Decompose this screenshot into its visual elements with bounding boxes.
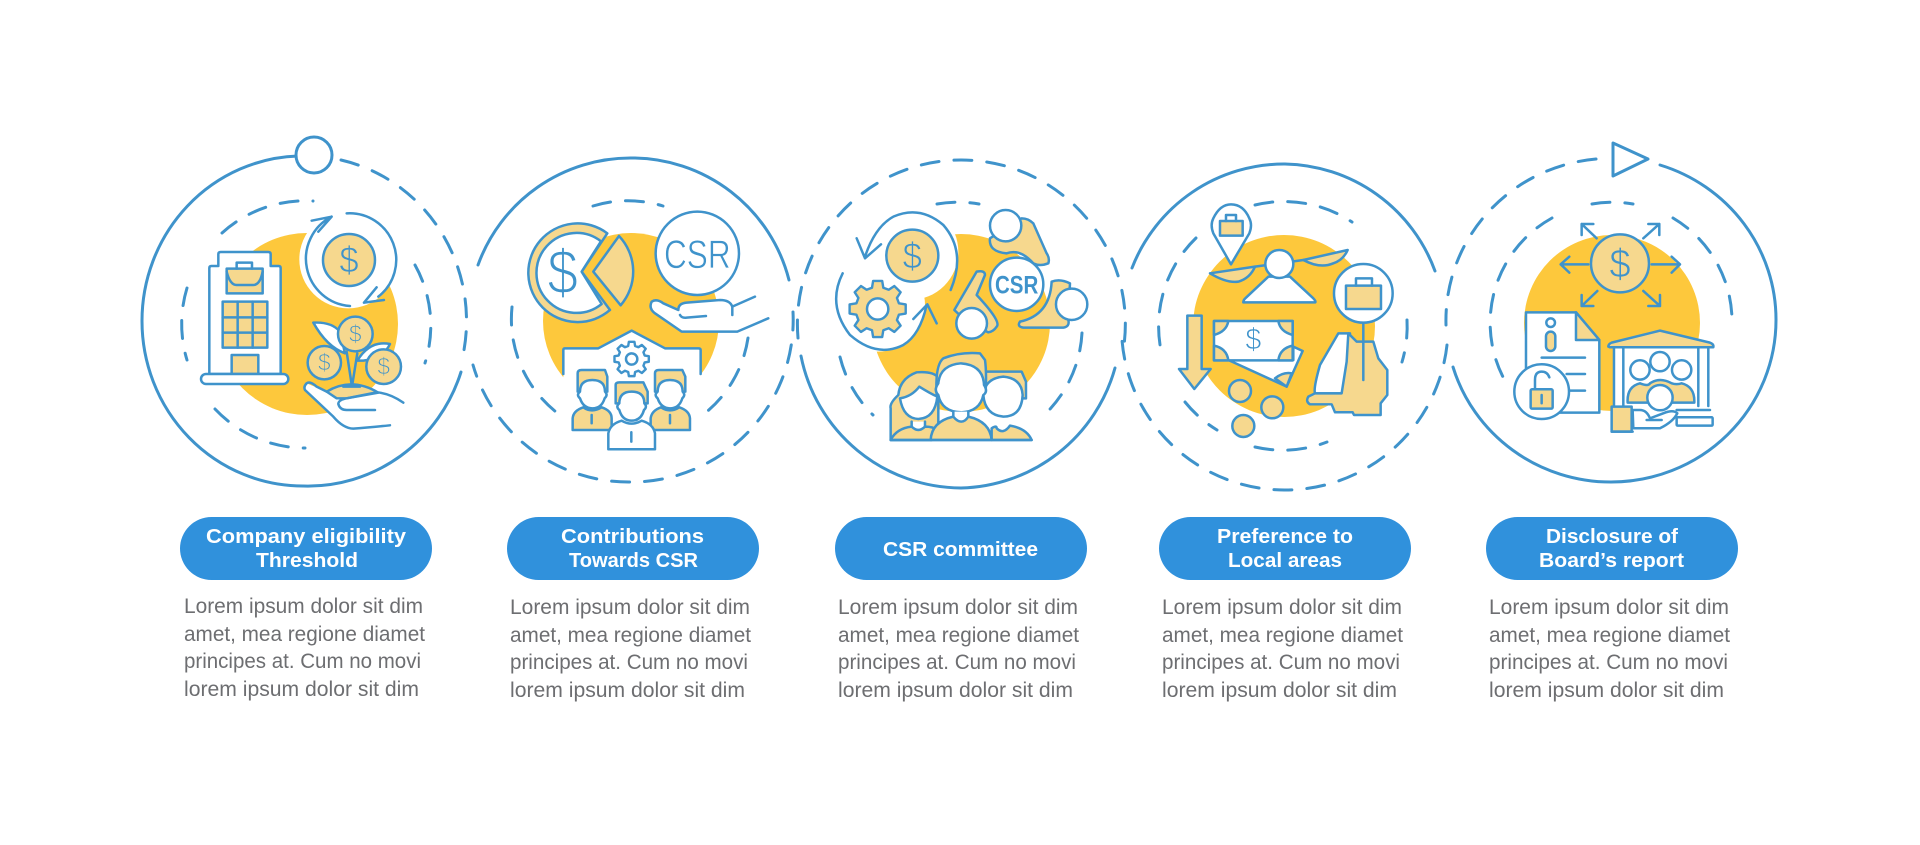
- icon: circular money arrows: $: [339, 239, 359, 281]
- icon: CSR network: [954, 210, 1087, 339]
- body text 2: principes at. Cum no movi: [510, 651, 748, 674]
- body text 3: amet, mea regione diamet: [838, 624, 1079, 647]
- label pill 1: Threshold: [256, 549, 358, 572]
- yellow blob 3: [872, 234, 1050, 412]
- outer ring 2: [473, 158, 793, 482]
- icon: hand holding magnifier: [1307, 264, 1393, 415]
- icon: open lock: [1514, 364, 1569, 419]
- icon: three people: [890, 353, 1032, 440]
- body text 1: [184, 595, 425, 701]
- label pill 1: [180, 517, 432, 580]
- body text 5: Lorem ipsum dolor sit dim: [1489, 596, 1729, 619]
- body text 4: Lorem ipsum dolor sit dim: [1162, 596, 1402, 619]
- icon: money and gear cycle: [832, 203, 958, 352]
- icon: dollar pie chart: [528, 223, 633, 322]
- label pill 3: CSR committee: [883, 538, 1038, 561]
- panel: CSR committee: [797, 160, 1125, 702]
- outer ring 4: [1122, 164, 1447, 490]
- yellow blob 2: [543, 233, 719, 409]
- icon: committee: [832, 203, 1087, 440]
- body text 3: [838, 596, 1079, 702]
- body text 1: lorem ipsum dolor sit dim: [184, 678, 419, 701]
- label pill 4: Preference to: [1217, 525, 1353, 548]
- label pill 4: Local areas: [1228, 549, 1342, 572]
- body text 4: amet, mea regione diamet: [1162, 624, 1403, 647]
- body text 4: [1162, 596, 1403, 702]
- icon: house with gear: [563, 331, 701, 413]
- icon: money plant in hand: [304, 317, 403, 429]
- icon: disclosure: [1514, 224, 1713, 432]
- icon: money plant in hand: $: [318, 350, 331, 377]
- body text 3: Lorem ipsum dolor sit dim: [838, 596, 1078, 619]
- body text 4: lorem ipsum dolor sit dim: [1162, 679, 1397, 702]
- label pill 2: Contributions: [561, 525, 704, 548]
- body text 2: Lorem ipsum dolor sit dim: [510, 596, 750, 619]
- icon: local preference: [1179, 204, 1393, 437]
- body text 3: lorem ipsum dolor sit dim: [838, 679, 1073, 702]
- label pill 2: Towards CSR: [569, 549, 698, 572]
- icon: team of three: [573, 370, 690, 449]
- icon: office building: [201, 252, 288, 384]
- body text 4: principes at. Cum no movi: [1162, 651, 1400, 674]
- icon: down arrow: [1179, 316, 1211, 389]
- body text 1: principes at. Cum no movi: [184, 650, 421, 673]
- body text 5: principes at. Cum no movi: [1489, 651, 1728, 674]
- icon: information document: [1526, 312, 1599, 413]
- panel: preference to local areas: [1122, 164, 1447, 702]
- icon: balance scale: [1210, 250, 1348, 302]
- panel: company eligibility threshold: [142, 137, 467, 701]
- body text 5: [1489, 596, 1730, 702]
- label pill 5: Disclosure of: [1546, 525, 1678, 548]
- label pill 1: Company eligibility: [206, 525, 407, 548]
- body text 2: amet, mea regione diamet: [510, 624, 751, 647]
- icon: money notes and coins: [1214, 321, 1303, 437]
- yellow blob 4: [1193, 235, 1375, 417]
- inner dashed ring 2: [511, 201, 748, 417]
- icon: money and gear cycle: $: [903, 234, 922, 276]
- panel: contributions towards CSR: [473, 158, 793, 702]
- label pill 5: [1486, 517, 1738, 580]
- body text 3: principes at. Cum no movi: [838, 651, 1076, 674]
- body text 2: [510, 596, 751, 702]
- icon: dollar with outward arrows: $: [1609, 240, 1631, 286]
- panel: disclosure of board's report: [1446, 143, 1776, 702]
- label pill 3: [835, 517, 1087, 580]
- label pill 4: [1159, 517, 1411, 580]
- body text 2: lorem ipsum dolor sit dim: [510, 679, 745, 702]
- icon: CSR network: CSR: [995, 272, 1038, 299]
- inner dashed ring 5: [1490, 202, 1732, 377]
- body text 5: amet, mea regione diamet: [1489, 624, 1730, 647]
- outer ring 3: [797, 160, 1125, 488]
- icon: money notes and coins: $: [1245, 323, 1261, 357]
- icon: pie chart, CSR hand, team: [528, 212, 768, 449]
- icon: dollar pie chart: $: [547, 238, 578, 308]
- icon: circular money arrows: [299, 210, 397, 308]
- icon: board building: [1608, 331, 1713, 432]
- icon: money plant in hand: $: [349, 321, 362, 348]
- yellow blob 1: [216, 233, 398, 415]
- label pill 5: Board’s report: [1539, 549, 1684, 572]
- outer ring 1 with start marker: [142, 137, 467, 486]
- body text 1: amet, mea regione diamet: [184, 623, 425, 646]
- body text 5: lorem ipsum dolor sit dim: [1489, 679, 1724, 702]
- icon: company and growing money: [201, 210, 403, 429]
- icon: location pin with briefcase: [1212, 204, 1251, 264]
- yellow blob 5: [1524, 235, 1700, 411]
- outer ring 5 with end arrow: [1446, 143, 1776, 482]
- inner dashed ring 1: [182, 201, 431, 448]
- icon: dollar with outward arrows: [1561, 224, 1680, 306]
- icon: money plant in hand: $: [377, 354, 390, 381]
- label pill 2: [507, 517, 759, 580]
- inner dashed ring 4: [1159, 202, 1407, 450]
- inner dashed ring 3: [840, 202, 1082, 417]
- icon: CSR in hand: [651, 212, 768, 332]
- icon: CSR in hand: CSR: [664, 233, 731, 277]
- body text 1: Lorem ipsum dolor sit dim: [184, 595, 423, 618]
